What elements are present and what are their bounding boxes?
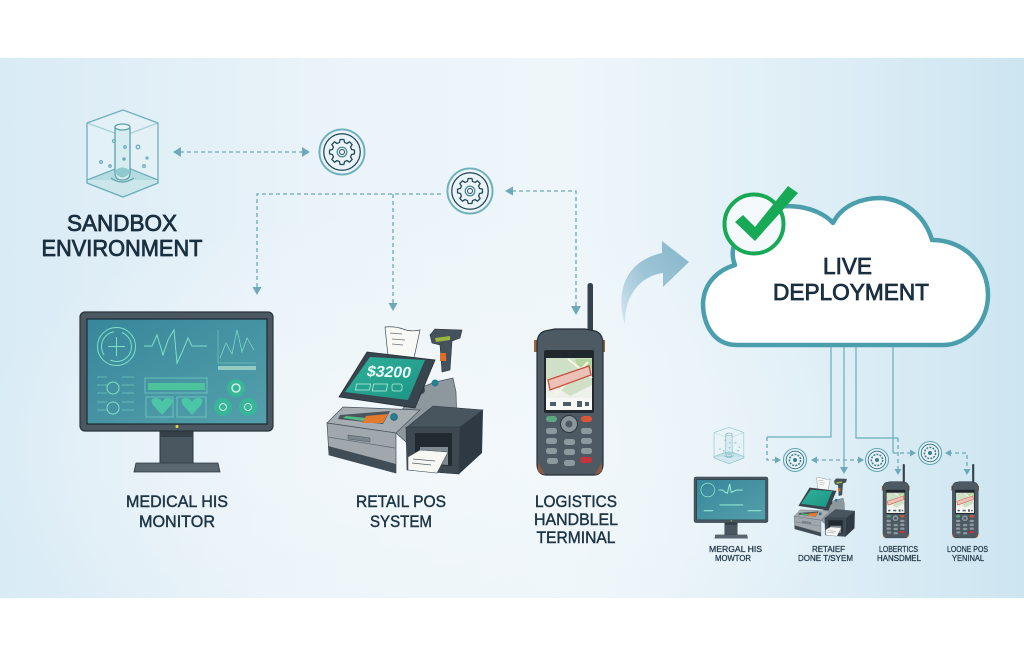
icon: green check badge bbox=[724, 186, 798, 254]
cloud heading: LIVE bbox=[823, 253, 872, 279]
label: logistics terminal: HANDBLEL bbox=[534, 510, 618, 529]
arrow: sandbox to gear bbox=[173, 147, 310, 157]
device: medical HIS monitor bbox=[80, 312, 273, 472]
mini labels: DONE T/SYEM bbox=[798, 553, 853, 563]
icon: mini gear 3 bbox=[918, 442, 942, 464]
icon: mini gear 2 bbox=[866, 448, 888, 472]
label: logistics terminal bbox=[534, 492, 618, 547]
mini device: handheld 1 bbox=[882, 464, 910, 538]
label: logistics terminal: TERMINAL bbox=[536, 528, 616, 547]
connectors: cloud to mini devices bbox=[767, 347, 970, 475]
icon: gear 2 bbox=[447, 168, 493, 214]
monitor screen content bbox=[97, 328, 256, 417]
arrows: gear to devices bbox=[252, 186, 581, 315]
mini labels: LOONE POS bbox=[947, 544, 988, 554]
mini labels: YENINAL bbox=[952, 553, 984, 563]
mini device: POS bbox=[794, 478, 855, 537]
mini device: monitor bbox=[694, 477, 768, 538]
icon: mini gear 1 bbox=[784, 448, 806, 472]
heading: sandbox environment bbox=[42, 210, 202, 261]
icon: mini sandbox cube bbox=[714, 427, 744, 464]
mini labels: MOWTOR bbox=[715, 553, 751, 563]
mini labels bbox=[709, 544, 988, 563]
POS screen icons bbox=[355, 384, 402, 391]
arrow: curved to live deployment bbox=[621, 241, 689, 325]
device: logistics handheld terminal bbox=[534, 283, 605, 475]
label: retail POS system: RETAIL POS bbox=[356, 492, 446, 511]
heading: sandbox environment: SANDBOX bbox=[67, 210, 177, 236]
mini device: handheld 2 bbox=[951, 464, 979, 538]
cloud: live deployment: DEPLOYMENT bbox=[773, 279, 929, 305]
label: retail POS system: SYSTEM bbox=[370, 512, 432, 531]
cloud: live deployment bbox=[703, 198, 988, 345]
label: retail POS system bbox=[356, 492, 446, 531]
device: retail POS system bbox=[327, 327, 483, 474]
POS screen amount: $3200 bbox=[365, 363, 413, 382]
mini labels: RETAIEF bbox=[812, 544, 845, 554]
icon: sandbox cube with test tube bbox=[87, 110, 158, 197]
label: medical HIS monitor: MEDICAL HIS bbox=[126, 492, 228, 511]
mini labels: HANSDMEL bbox=[877, 553, 921, 563]
label: logistics terminal: LOGISTICS bbox=[535, 492, 617, 511]
mini labels: MERGAL HIS bbox=[709, 544, 762, 554]
heading: sandbox environment: ENVIRONMENT bbox=[42, 235, 202, 261]
mini labels: LOBERTICS bbox=[879, 544, 918, 554]
icon: gear 1 bbox=[319, 129, 365, 175]
label: medical HIS monitor: MONITOR bbox=[139, 512, 215, 531]
label: medical HIS monitor bbox=[126, 492, 228, 531]
